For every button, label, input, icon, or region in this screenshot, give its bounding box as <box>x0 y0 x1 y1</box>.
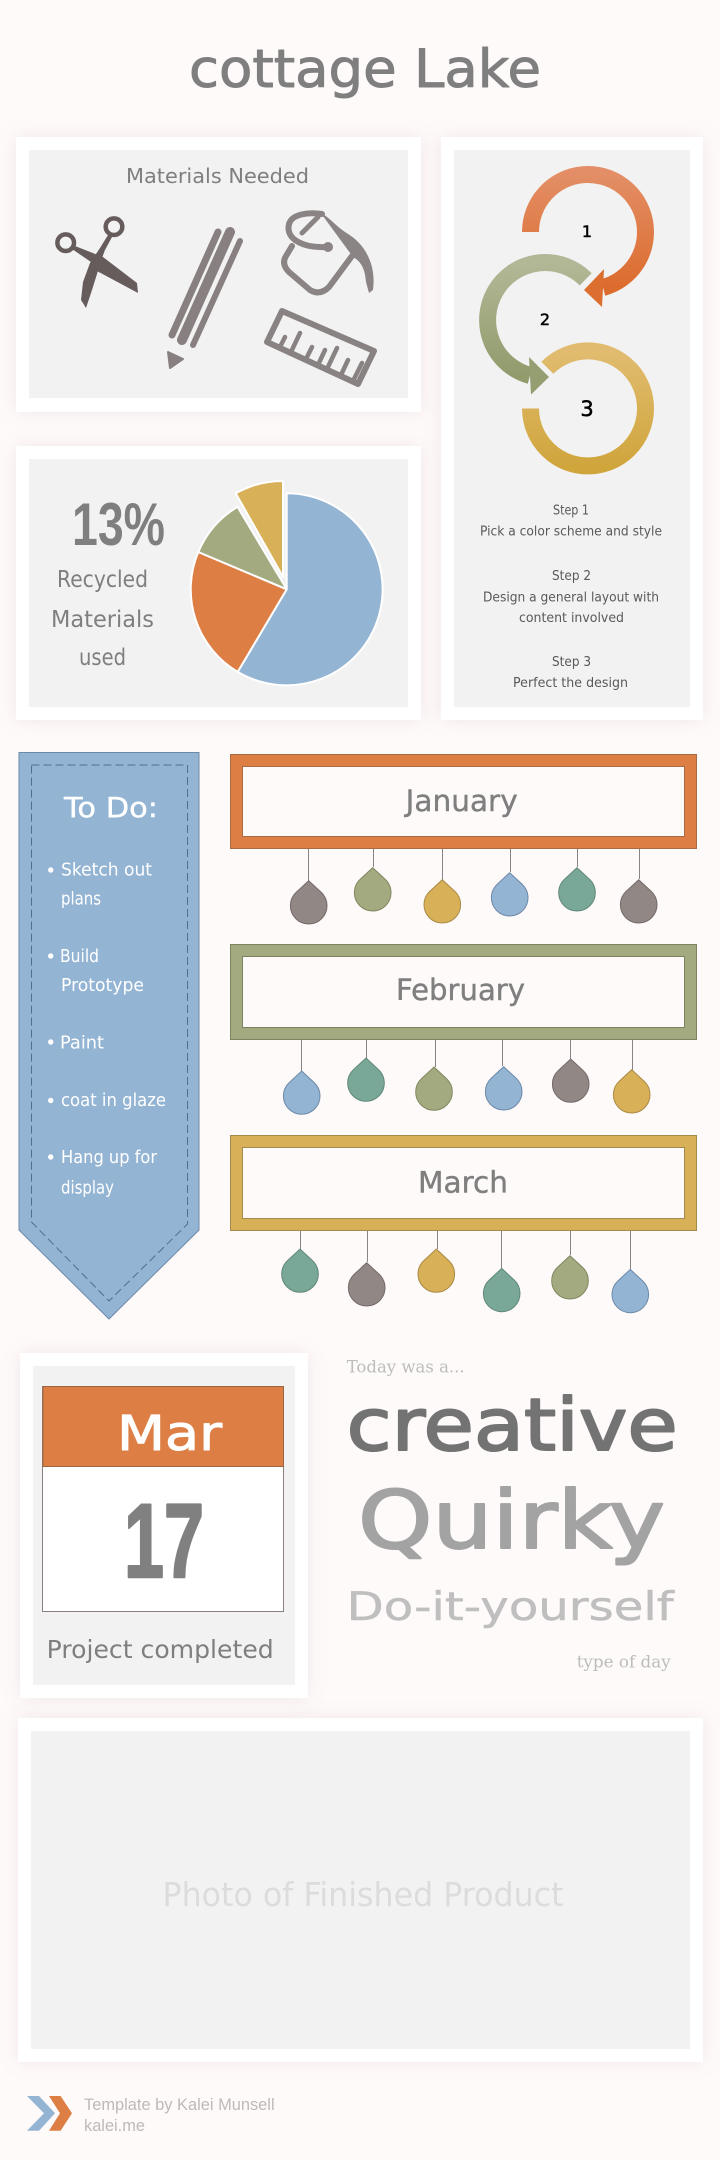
icon: ruler <box>267 311 374 384</box>
month label: February <box>396 973 525 1007</box>
label: recycled materials used: Materials <box>51 607 154 633</box>
step numbers: 3 <box>580 397 594 421</box>
calendar month: Mar <box>117 1406 222 1462</box>
caption: project completed: Project completed <box>47 1635 274 1664</box>
step numbers <box>540 222 594 421</box>
credit text <box>84 2095 275 2135</box>
label: recycled materials used: Recycled <box>57 567 148 593</box>
title: cottage Lake <box>189 39 541 100</box>
panel: calendar <box>20 1353 308 1698</box>
credit text: Template by Kalei Munsell <box>84 2095 275 2114</box>
icon: scissors <box>57 218 138 308</box>
to do list: Paint <box>60 1033 104 1054</box>
heading: materials needed: Materials Needed <box>126 164 309 188</box>
text block: type of day: type of day <box>577 1653 671 1673</box>
icon: paint bucket <box>284 212 374 293</box>
text block: type of day: creative <box>347 1383 678 1467</box>
month label: January <box>404 784 518 818</box>
to do list: Build <box>60 946 99 967</box>
hanging drops: january <box>290 849 657 924</box>
step descriptions: Design a general layout with <box>483 590 659 606</box>
to do list <box>48 860 166 1198</box>
to do list: coat in glaze <box>61 1090 166 1111</box>
panel: february <box>230 944 696 1114</box>
step numbers: 2 <box>540 310 550 329</box>
label: recycled materials used <box>51 567 154 671</box>
step descriptions: content involved <box>519 610 624 626</box>
panel: january <box>230 754 696 924</box>
text block: type of day <box>347 1357 678 1673</box>
calendar date: 17 <box>124 1483 204 1600</box>
panel: march <box>230 1136 696 1313</box>
panel: finished product photo <box>18 1718 703 2062</box>
placeholder text: Photo of Finished Product <box>162 1875 564 1914</box>
step numbers: 1 <box>582 222 592 241</box>
arrow: ring 2 <box>488 263 586 395</box>
arrow: ring 3 <box>530 351 645 466</box>
to do list: Hang up for <box>61 1147 158 1168</box>
hanging drops: march <box>282 1231 649 1313</box>
statistic: 13%: 13% <box>72 491 165 558</box>
to do list: plans <box>61 888 101 910</box>
step descriptions: Pick a color scheme and style <box>480 524 662 540</box>
panel: steps <box>441 137 703 720</box>
step descriptions: Step 3 <box>552 654 591 670</box>
arrow: ring 1 <box>530 174 646 307</box>
step descriptions: Step 2 <box>552 568 591 584</box>
icon: pencil <box>168 232 240 368</box>
calendar header <box>43 1386 284 1466</box>
credit text: kalei.me <box>84 2116 145 2135</box>
to do list: display <box>61 1178 114 1198</box>
pie chart <box>191 481 383 685</box>
text block: type of day: Quirky <box>358 1474 665 1567</box>
step descriptions: Perfect the design <box>513 675 628 691</box>
month label: March <box>418 1166 508 1200</box>
footer credit <box>27 2095 275 2135</box>
panel: recycled materials <box>16 446 421 720</box>
text block: type of day: Today was a... <box>347 1357 465 1377</box>
to do list: Prototype <box>61 975 144 996</box>
calendar body <box>42 1386 284 1612</box>
icon: chevrons <box>27 2096 72 2131</box>
hanging drops: february <box>283 1040 650 1114</box>
step descriptions: Step 1 <box>553 503 589 519</box>
label: recycled materials used: used <box>79 645 126 671</box>
text block: type of day: Do-it-yourself <box>347 1585 675 1630</box>
panel: to do banner <box>19 752 199 1319</box>
step descriptions <box>480 503 662 691</box>
heading: to do: To Do: <box>63 791 158 824</box>
panel: materials needed <box>16 137 421 412</box>
to do list: Sketch out <box>61 860 152 880</box>
